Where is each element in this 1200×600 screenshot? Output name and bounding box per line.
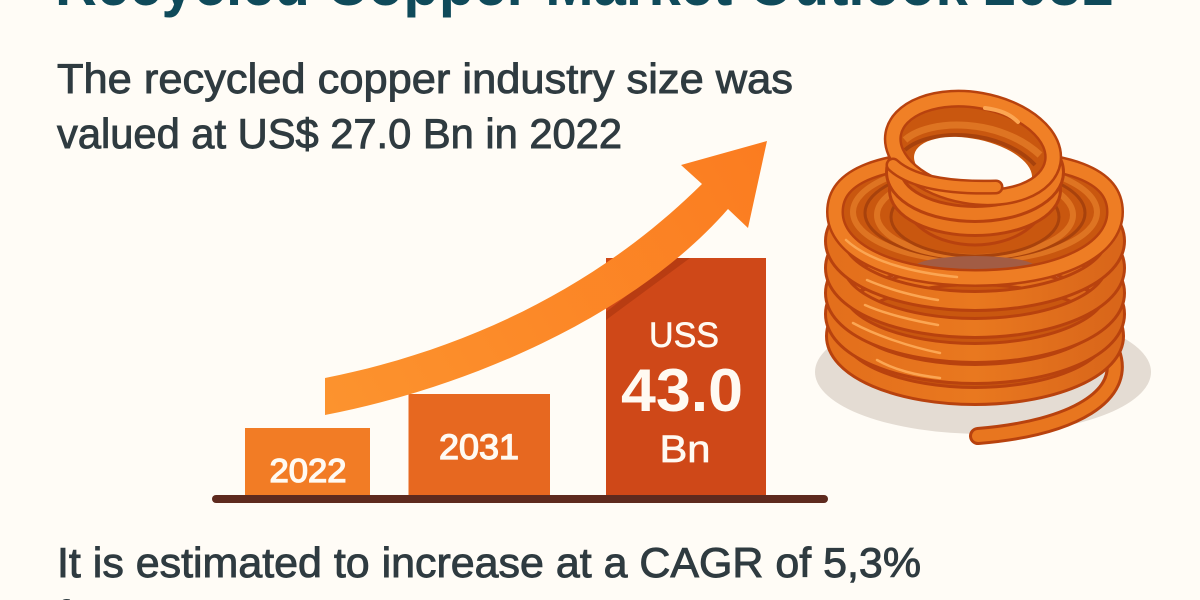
bar: USS 43.0 Bn: Bn <box>660 429 710 471</box>
coil floor <box>915 256 1035 278</box>
coil shadow <box>815 310 1151 434</box>
bar: 2031: 2031 <box>439 428 519 467</box>
bar: USS 43.0 Bn <box>606 258 766 496</box>
bar: 2022 <box>245 428 370 496</box>
loose wire end <box>978 352 1115 436</box>
intro text: The recycled copper industry size was <box>57 55 793 102</box>
icon: copper wire coil <box>815 87 1151 436</box>
upper coil inner wall <box>890 90 1056 206</box>
wire inner end <box>893 165 996 187</box>
upper coil hole <box>908 127 1038 207</box>
top winding <box>835 158 1115 278</box>
bar: USS 43.0 Bn: 43.0 <box>621 357 743 424</box>
upper coil top ring <box>885 87 1061 209</box>
lower coil windings <box>835 181 1115 396</box>
bar: 2031 <box>408 394 550 496</box>
bar chart <box>212 258 828 503</box>
small upper coil <box>885 87 1061 245</box>
wire highlights <box>846 240 957 378</box>
bar: USS 43.0 Bn: USS <box>649 316 719 355</box>
growth arrow <box>325 141 767 415</box>
intro text: valued at US$ 27.0 Bn in 2022 <box>57 110 622 157</box>
intro text <box>57 55 793 157</box>
axis baseline <box>212 495 828 503</box>
CAGR text: It is estimated to increase at a CAGR of 5,3% <box>57 539 921 586</box>
bar: 2022: 2022 <box>270 452 346 489</box>
coil interior <box>835 158 1115 278</box>
